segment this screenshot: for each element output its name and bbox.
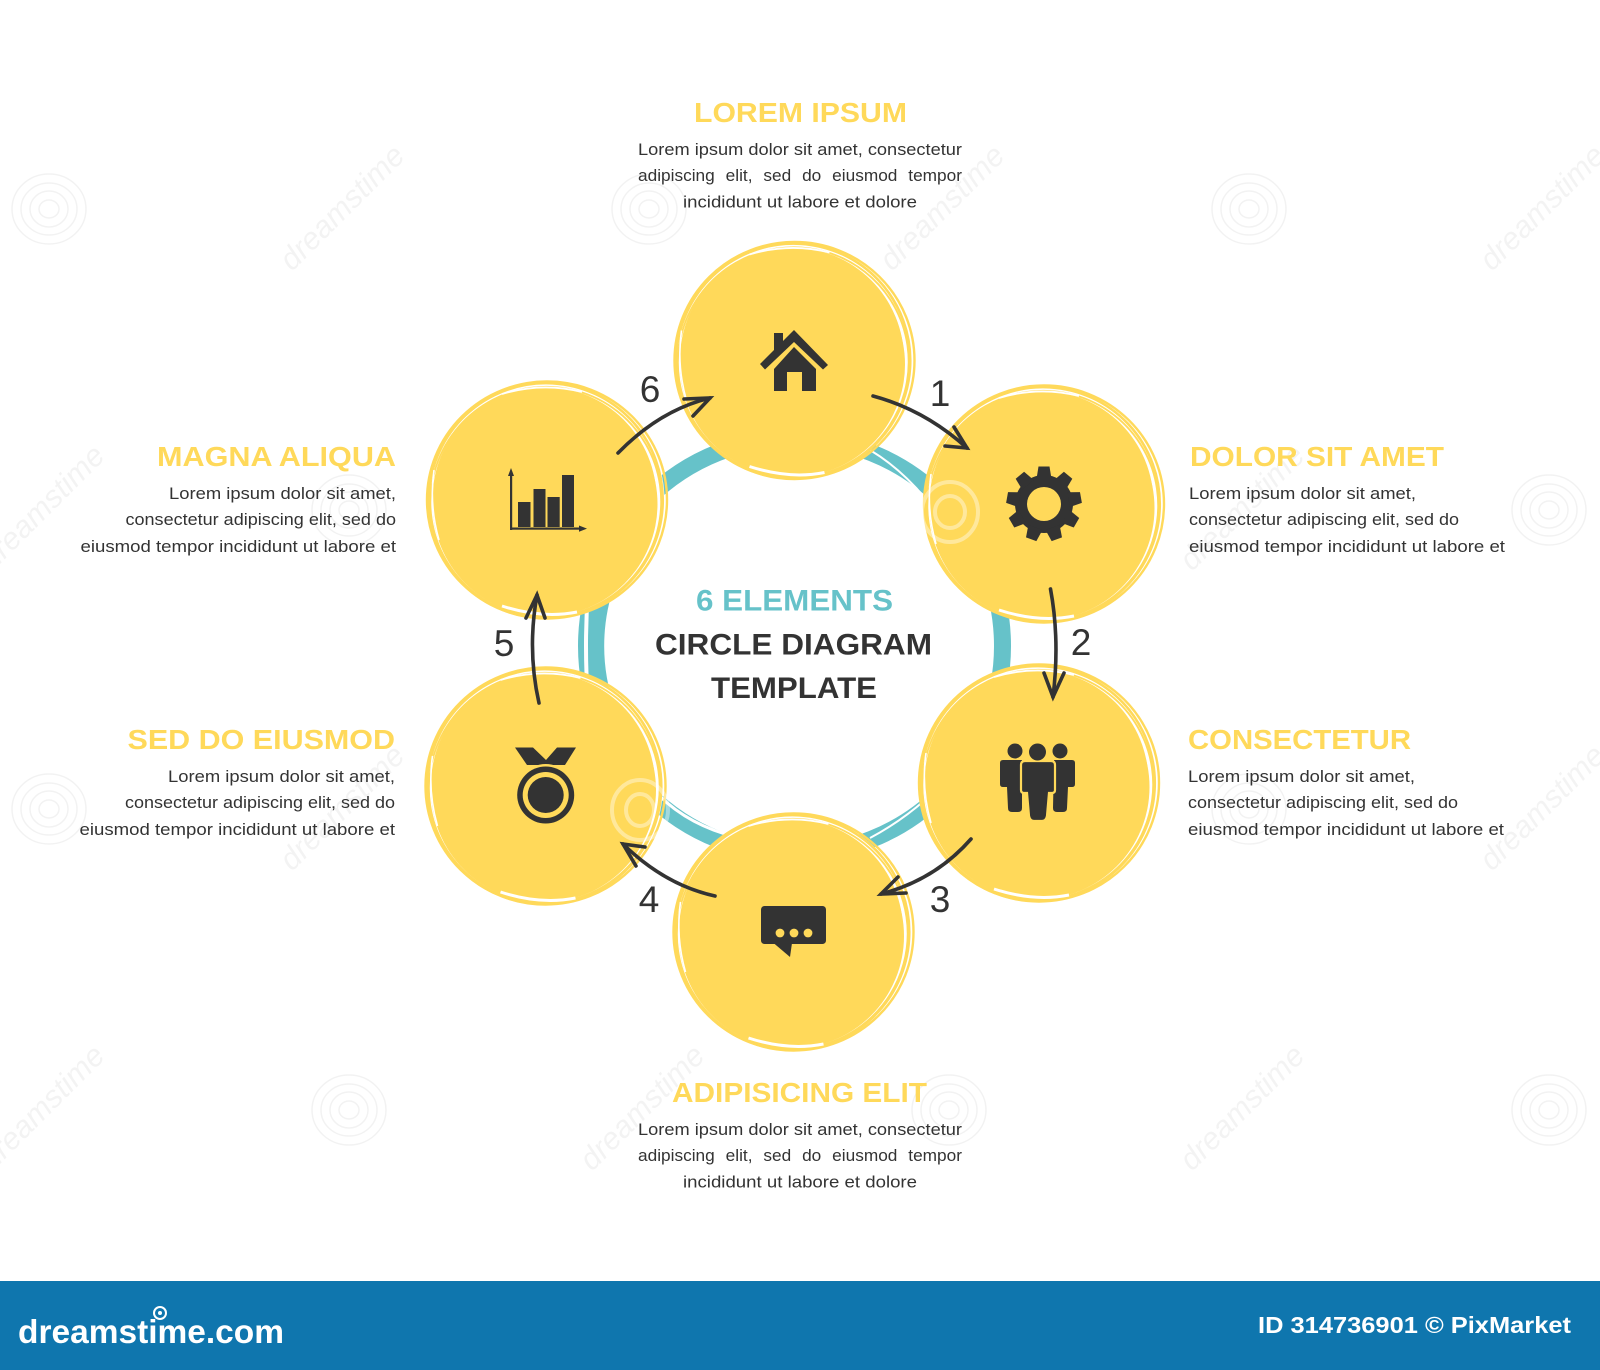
text block: Lorem Ipsum: incididunt ut labore et dolore (683, 192, 917, 212)
watermark layer: dreamstime (272, 738, 411, 877)
watermark layer: dreamstime (272, 138, 411, 277)
text block: Adipisicing Elit: Lorem ipsum dolor sit amet, consectetur (638, 1120, 962, 1139)
text block: Consectetur: CONSECTETUR (1188, 724, 1411, 755)
text block: Magna Aliqua: consectetur adipiscing elit, sed do (126, 510, 396, 529)
watermark layer (0, 138, 1600, 1177)
text block: Adipisicing Elit: adipiscing elit, sed do eiusmod tempor (638, 1146, 962, 1165)
footer logo: dreamstime.com (18, 1313, 284, 1350)
text block: Lorem Ipsum: Lorem ipsum dolor sit amet, consectetur (638, 140, 962, 159)
watermark layer: dreamstime (1172, 438, 1311, 577)
icon: gear (1006, 466, 1082, 542)
watermark highlights over circles (612, 482, 978, 840)
arrow 3 to 4 (881, 839, 971, 894)
text block: Consectetur: consectetur adipiscing elit, sed do (1188, 793, 1458, 812)
circle 1: top (636, 205, 951, 520)
step numbers (494, 369, 1091, 920)
text block: Magna Aliqua: Lorem ipsum dolor sit amet, (169, 484, 396, 503)
text block: Adipisicing Elit: ADIPISICING ELIT (672, 1077, 927, 1108)
step numbers: 5 (494, 623, 514, 664)
text block: Lorem Ipsum: LOREM IPSUM (694, 97, 907, 128)
center title (655, 584, 932, 705)
text block: Consectetur (1188, 724, 1504, 839)
text block: Dolor Sit Amet (1189, 441, 1505, 556)
step numbers: 1 (930, 373, 950, 414)
watermark layer: dreamstime (572, 1038, 711, 1177)
step numbers: 4 (639, 879, 659, 920)
text block: Consectetur: eiusmod tempor incididunt ut labore et (1188, 820, 1504, 839)
icon: bar chart (508, 468, 587, 532)
text block: Sed Do Eiusmod (80, 724, 395, 839)
watermark layer: dreamstime (1172, 1038, 1311, 1177)
text block: Sed Do Eiusmod: SED DO EIUSMOD (128, 724, 395, 755)
text block: Dolor Sit Amet: consectetur adipiscing elit, sed do (1189, 510, 1459, 529)
circle 2: upper right (885, 349, 1200, 663)
step numbers: 2 (1071, 622, 1091, 663)
arrow 1 to 2 (873, 396, 967, 448)
circle 3: lower right (880, 628, 1195, 942)
circle 6: upper left (388, 345, 703, 659)
arrow 6 to 1 (618, 398, 710, 453)
icon: house (760, 330, 828, 391)
text block: Sed Do Eiusmod: Lorem ipsum dolor sit amet, (168, 767, 395, 786)
text block: Adipisicing Elit: incididunt ut labore et dolore (683, 1172, 917, 1192)
text block: Adipisicing Elit (638, 1077, 962, 1192)
arrow 4 to 5 (623, 844, 715, 896)
text block: Dolor Sit Amet: Lorem ipsum dolor sit amet, (1189, 484, 1416, 503)
circle 4: bottom (635, 777, 950, 1091)
footer image id: ID 314736901 © PixMarket (1258, 1312, 1571, 1338)
text block: Magna Aliqua (80, 441, 396, 556)
center title: CIRCLE DIAGRAM (655, 628, 932, 662)
teal ring (586, 438, 1002, 854)
arrow 2 to 3 (1044, 589, 1064, 697)
icon: people (1000, 744, 1075, 821)
text block: Dolor Sit Amet: eiusmod tempor incididunt ut labore et (1189, 537, 1505, 556)
text block: Lorem Ipsum (638, 97, 962, 212)
icon: medal (515, 748, 577, 826)
circle 5: lower left (387, 631, 702, 945)
text block: Lorem Ipsum: adipiscing elit, sed do eiusmod tempor (638, 166, 962, 185)
step numbers: 3 (930, 879, 950, 920)
text block: Sed Do Eiusmod: eiusmod tempor incididunt ut labore et (80, 820, 395, 839)
center title: 6 ELEMENTS (696, 584, 893, 618)
text block: Consectetur: Lorem ipsum dolor sit amet, (1188, 767, 1415, 786)
icon: speech bubble (761, 906, 826, 957)
text block: Magna Aliqua: eiusmod tempor incididunt ut labore et (80, 537, 396, 556)
text block: Dolor Sit Amet: DOLOR SIT AMET (1190, 441, 1444, 472)
text block: Sed Do Eiusmod: consectetur adipiscing elit, sed do (125, 793, 395, 812)
footer bar (0, 1281, 1600, 1370)
text block: Magna Aliqua: MAGNA ALIQUA (157, 441, 396, 472)
arrow 5 to 6 (526, 595, 545, 703)
center title: TEMPLATE (711, 672, 877, 705)
watermark layer: dreamstime (872, 138, 1011, 277)
step numbers: 6 (640, 369, 660, 410)
